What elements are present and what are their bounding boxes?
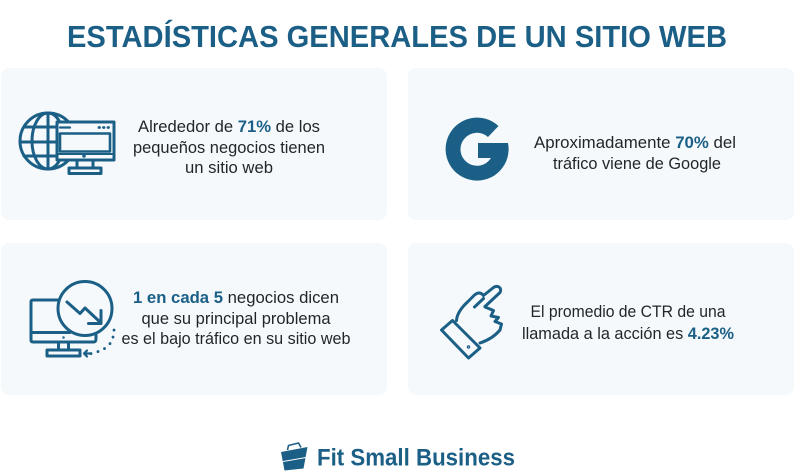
text: 71% of small businesses [133, 117, 325, 177]
text: 71% of small businesses: Alrededor de 71% de los [138, 117, 320, 136]
text: 1 in 5 businesses: es el bajo tráfico en su sitio web [122, 329, 350, 348]
text: 1 in 5 businesses: 1 en cada 5 negocios dicen [133, 288, 339, 307]
text: 70% of traffic: tráfico viene de Google [553, 154, 721, 173]
icon: monitor with falling chart [31, 282, 114, 356]
text: 1 in 5 businesses [122, 288, 350, 348]
icon: Google G [446, 118, 509, 181]
icon: globe and monitor [20, 113, 114, 174]
panel: call to action CTR [408, 243, 794, 395]
text: average CTR: llamada a la acción es 4.23% [522, 324, 734, 343]
panel: Google traffic [408, 68, 794, 220]
text: 70% of traffic: Aproximadamente 70% del [534, 133, 736, 152]
text: 1 in 5 businesses: que su principal problema [142, 309, 331, 328]
title: ESTADÍSTICAS GENERALES DE UN SITIO WEB [67, 19, 727, 54]
text: average CTR [522, 302, 734, 343]
icon: pointing hand [442, 286, 502, 358]
icon: briefcase [281, 443, 308, 470]
text: average CTR: El promedio de CTR de una [530, 302, 726, 321]
text: 71% of small businesses: pequeños negocios tienen [133, 138, 325, 157]
panel: low traffic problem [1, 243, 387, 395]
text: 71% of small businesses: un sitio web [185, 158, 273, 177]
logo wordmark: Fit Small Business [317, 444, 515, 471]
logo: Fit Small Business [281, 443, 515, 471]
panel: small businesses with a website [1, 68, 387, 220]
text: 70% of traffic [534, 133, 736, 173]
